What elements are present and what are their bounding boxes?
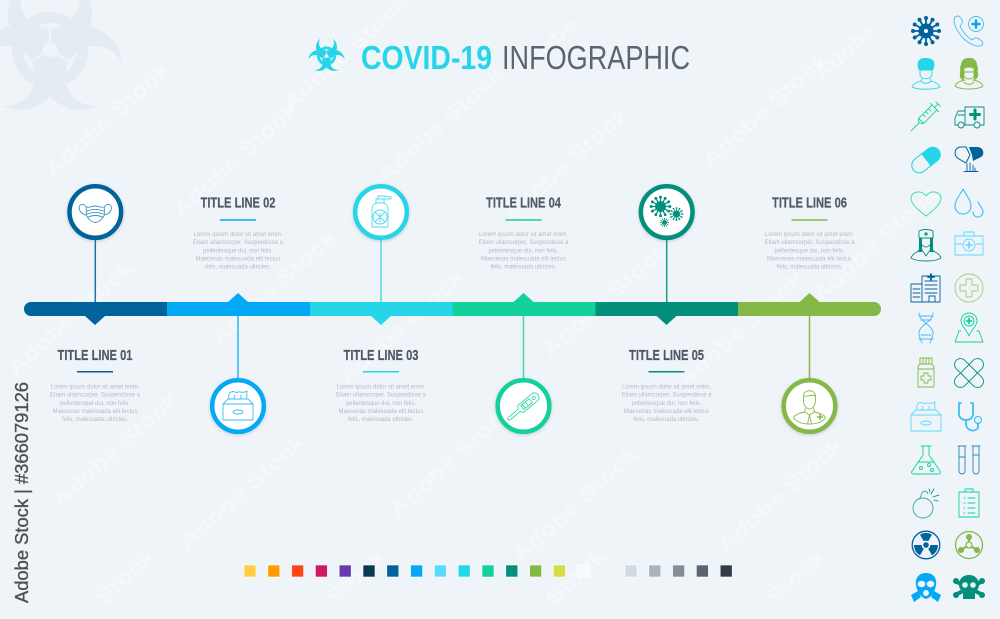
- icon: clipboard: [959, 489, 979, 517]
- heading 01: TITLE LINE 01: [58, 348, 132, 364]
- text block 05: pellentesque dui, non felis.: [632, 400, 702, 407]
- Adobe Stock watermark pattern: Adobe Stock: [674, 268, 808, 392]
- icon: thermometer: [505, 391, 541, 423]
- text block 05: Maecenas malesuada elit lectus: [624, 408, 710, 415]
- timeline bar: [24, 293, 881, 325]
- Adobe Stock watermark pattern: Stock: [761, 544, 830, 610]
- icon: capsule: [909, 144, 943, 176]
- title text: COVID-19: COVID-19: [361, 39, 492, 76]
- text block 04: felis, malesuada ultricies.: [490, 264, 557, 270]
- connector 03: [380, 238, 382, 302]
- text block 04: [478, 231, 569, 270]
- icon: chemical: [956, 532, 982, 558]
- icon: ambulance: [955, 107, 984, 128]
- Adobe Stock watermark pattern: Adobe Stock: [809, 183, 943, 307]
- icon: syringe: [907, 100, 942, 135]
- Adobe Stock watermark pattern: Adobe: [810, 19, 881, 86]
- step 05: [622, 186, 712, 423]
- node 01: [70, 186, 121, 238]
- text block 05: Lorem ipsum dolor sit amet enim.: [622, 384, 711, 390]
- divider 02: [220, 219, 256, 221]
- text block 06: pellentesque dui, non felis.: [774, 247, 845, 254]
- text block 03: felis, malesuada ultricies.: [348, 416, 414, 423]
- icon: tissue box: [223, 391, 253, 420]
- icon: open capsule: [955, 147, 983, 172]
- icon: tissue box small: [911, 402, 941, 431]
- icon: DNA: [919, 313, 933, 343]
- text block 02: felis, malesuada ultricies.: [205, 264, 271, 270]
- node 06: [784, 380, 835, 432]
- text block 01: pellentesque dui, non felis.: [60, 400, 130, 407]
- connector 02: [237, 316, 239, 380]
- icon: bomb: [913, 489, 939, 518]
- icon: map pin: [955, 313, 983, 342]
- icon: woman with mask: [955, 58, 983, 89]
- Adobe Stock watermark pattern: Adobe Stock: [207, 226, 341, 350]
- divider 04: [506, 219, 542, 221]
- divider 06: [792, 219, 828, 221]
- Adobe Stock watermark pattern: Adobe Stock: [279, 0, 413, 115]
- icon: heart: [911, 192, 941, 216]
- text block 06: Lorem ipsum dolor sit amet enim.: [765, 231, 854, 238]
- icon: doctor: [794, 391, 826, 424]
- divider 01: [77, 371, 113, 372]
- icon: circle cross: [955, 274, 983, 302]
- Adobe Stock watermark pattern: Adobe Stock: [386, 398, 520, 522]
- text block 03: pellentesque dui, non felis.: [346, 400, 416, 407]
- connector 05: [666, 238, 668, 302]
- node 05: [641, 186, 692, 238]
- icon: skull: [953, 575, 985, 599]
- Adobe Stock watermark pattern: Adobe Stock: [499, 103, 633, 227]
- Adobe Stock watermark pattern: Adobe Stock: [374, 63, 508, 187]
- divider 05: [648, 371, 684, 372]
- icon set sidebar: [907, 16, 986, 602]
- text block 03: Etiam ullamcorper. Suspendisse a: [336, 392, 426, 399]
- icon: phone: [954, 16, 984, 46]
- step 02: [193, 196, 283, 432]
- icon: bandages: [952, 356, 986, 390]
- text block 03: Lorem ipsum dolor sit amet enim.: [336, 384, 426, 390]
- text block 01: Etiam ullamcorper. Suspendisse a: [50, 392, 140, 399]
- heading 06: TITLE LINE 06: [772, 196, 847, 212]
- icon: sanitizer spray: [372, 196, 391, 227]
- icon: gas mask: [911, 573, 941, 602]
- colour palette: [244, 565, 732, 577]
- icon: nurse: [911, 230, 941, 261]
- divider 03: [363, 371, 399, 372]
- text block 06: felis, malesuada ultricies.: [776, 264, 843, 270]
- text block 02: Lorem ipsum dolor sit amet enim.: [194, 231, 283, 238]
- heading 04: TITLE LINE 04: [486, 196, 561, 212]
- Adobe Stock watermark pattern: Stock: [541, 544, 610, 610]
- title: [304, 34, 690, 78]
- icon: face mask: [79, 204, 111, 222]
- icon: viruses: [651, 197, 682, 226]
- text block 06: Maecenas malesuada elit lectus: [767, 256, 853, 262]
- text block 04: Etiam ullamcorper. Suspendisse a: [478, 239, 569, 246]
- Adobe Stock watermark pattern: Adobe Stock: [176, 430, 310, 554]
- text block 06: [764, 231, 855, 270]
- Adobe Stock watermark pattern: Adobe Stock: [335, 265, 469, 389]
- title text: INFOGRAPHIC: INFOGRAPHIC: [502, 39, 690, 76]
- Adobe Stock watermark pattern: Adobe: [510, 14, 581, 81]
- icon: virus: [913, 18, 939, 44]
- Adobe Stock watermark pattern: Stock: [91, 544, 160, 610]
- step 03: [336, 186, 426, 423]
- icon: hospital: [911, 274, 940, 302]
- heading 03: TITLE LINE 03: [344, 348, 418, 364]
- Adobe Stock watermark pattern: Adobe Stock: [714, 433, 848, 557]
- text block 05: [622, 384, 712, 423]
- text block 04: Maecenas malesuada elit lectus: [481, 256, 567, 262]
- icon: stethoscope: [959, 403, 982, 431]
- text block 05: Etiam ullamcorper. Suspendisse a: [622, 392, 712, 399]
- Adobe Stock watermark pattern: Adobe Stock: [4, 256, 138, 380]
- text block 03: Maecenas malesuada elit lectus: [338, 408, 424, 415]
- heading 02: TITLE LINE 02: [200, 196, 276, 212]
- icon: drops: [955, 189, 983, 217]
- connector 06: [808, 316, 810, 380]
- step 01: [50, 186, 140, 423]
- text block 02: [193, 231, 283, 270]
- node 02: [212, 380, 264, 432]
- Adobe Stock watermark pattern: Adobe Stock: [169, 98, 303, 222]
- text block 03: [336, 384, 426, 423]
- icon: radiation: [912, 531, 940, 559]
- text block 02: Etiam ullamcorper. Suspendisse a: [193, 239, 283, 246]
- connector 04: [522, 316, 524, 380]
- icon: first aid kit: [955, 232, 983, 255]
- text block 02: pellentesque dui, non felis.: [203, 247, 273, 254]
- Adobe Stock watermark pattern: Stock: [321, 544, 390, 610]
- Adobe Stock watermark pattern: Adobe Stock: [539, 238, 673, 362]
- icon: man with mask: [912, 58, 940, 89]
- connector 01: [94, 238, 96, 302]
- node 03: [355, 186, 407, 238]
- text block 01: Maecenas malesuada elit lectus: [52, 408, 138, 415]
- text block 01: felis, malesuada ultricies.: [62, 416, 128, 423]
- step 06: [764, 196, 855, 432]
- text block 05: felis, malesuada ultricies.: [634, 416, 700, 423]
- icon: medicine bottle: [918, 358, 934, 387]
- text block 06: Etiam ullamcorper. Suspendisse a: [764, 239, 855, 246]
- text block 01: [50, 384, 140, 423]
- Adobe Stock watermark pattern: Adobe Stock: [509, 443, 643, 567]
- node 04: [498, 380, 549, 432]
- text block 01: Lorem ipsum dolor sit amet enim.: [50, 384, 140, 390]
- icon: biohazard: [304, 34, 349, 78]
- stock id vertical text: Adobe Stock | #366079126: [12, 382, 32, 603]
- background biohazard symbol: [0, 0, 140, 140]
- icon: test tubes: [958, 446, 980, 474]
- heading 05: TITLE LINE 05: [629, 348, 704, 364]
- Adobe Stock watermark pattern: Adobe Stock: [49, 388, 183, 512]
- Adobe Stock watermark pattern: Adobe Stock: [41, 58, 175, 182]
- step 04: [478, 196, 569, 432]
- icon: flask: [912, 446, 940, 474]
- text block 02: Maecenas malesuada elit lectus: [196, 256, 281, 262]
- Adobe Stock watermark pattern: Adobe Stock: [699, 48, 833, 172]
- text block 04: Lorem ipsum dolor sit amet enim.: [479, 231, 568, 238]
- text block 04: pellentesque dui, non felis.: [488, 247, 559, 254]
